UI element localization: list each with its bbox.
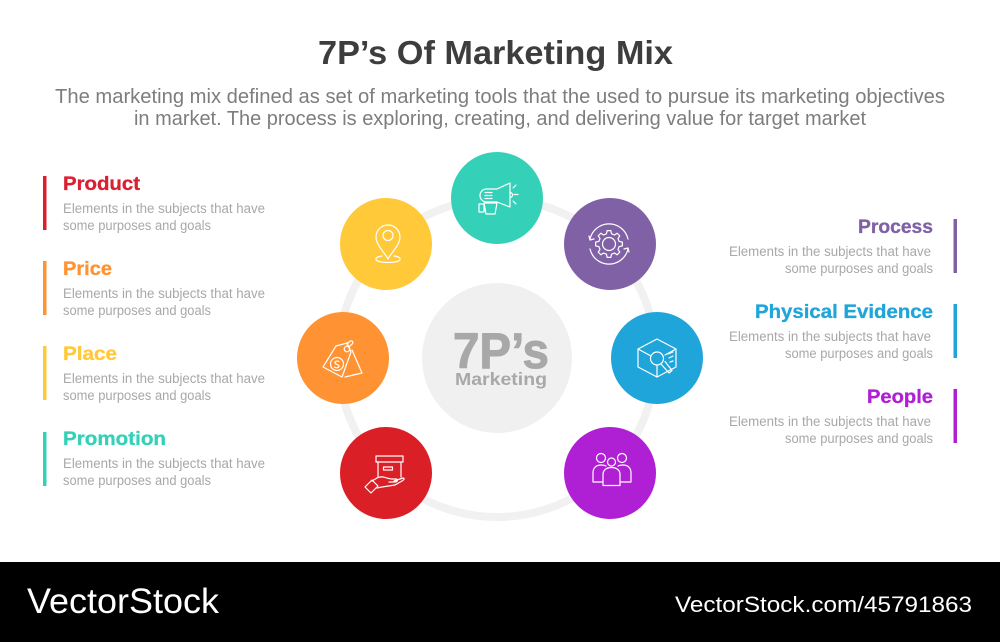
item: product: Elements in the subjects that have (63, 201, 265, 216)
subtitle: The marketing mix defined as set of marketing tools that the used to pursue its marketing objectives (55, 86, 945, 108)
item: price: some purposes and goals (63, 303, 211, 318)
item: promotion: Elements in the subjects that have (63, 456, 265, 471)
item: place: some purposes and goals (63, 388, 211, 403)
item: place (43, 344, 265, 403)
node: physical evidence box (611, 312, 703, 404)
item: physical evidence: some purposes and goals (785, 346, 933, 361)
item: price (43, 259, 265, 318)
footer bar: VectorStock.com/45791863 (675, 592, 972, 617)
item: process: some purposes and goals (785, 261, 933, 276)
center circle (422, 283, 572, 433)
item: product: Product (63, 174, 141, 195)
item: process: Elements in the subjects that have (729, 244, 931, 259)
item: place: Elements in the subjects that have (63, 371, 265, 386)
item: people: some purposes and goals (785, 431, 933, 446)
node: price tag (297, 312, 389, 404)
item: people: Elements in the subjects that have (729, 414, 931, 429)
title: 7P’s Of Marketing Mix (318, 34, 674, 71)
item: promotion: some purposes and goals (63, 473, 211, 488)
item: people (729, 387, 957, 446)
node: process gear (564, 198, 656, 290)
item: product: some purposes and goals (63, 218, 211, 233)
subtitle: in market. The process is exploring, creating, and delivering value for target market (134, 108, 866, 130)
center circle: 7P’s (453, 323, 549, 379)
node: place pin (340, 198, 432, 290)
item: physical evidence: Elements in the subjects that have (729, 329, 931, 344)
footer bar: VectorStock (27, 582, 220, 621)
item: price: Elements in the subjects that have (63, 286, 265, 301)
subtitle (55, 86, 945, 130)
item: price: Price (63, 259, 112, 280)
node: people group (564, 427, 656, 519)
item: process (729, 217, 957, 276)
item: physical evidence: Physical Evidence (755, 302, 933, 323)
item: people: People (867, 387, 933, 408)
item: physical evidence (729, 302, 957, 361)
item: promotion: Promotion (63, 429, 166, 450)
node: product box in hand (340, 427, 432, 519)
ring (338, 199, 656, 517)
node: promotion megaphone (451, 152, 543, 244)
center circle: Marketing (455, 369, 547, 389)
footer bar (0, 562, 1000, 642)
item: promotion (43, 429, 265, 488)
item: place: Place (63, 344, 117, 365)
item: product (43, 174, 265, 233)
item: process: Process (858, 217, 933, 238)
